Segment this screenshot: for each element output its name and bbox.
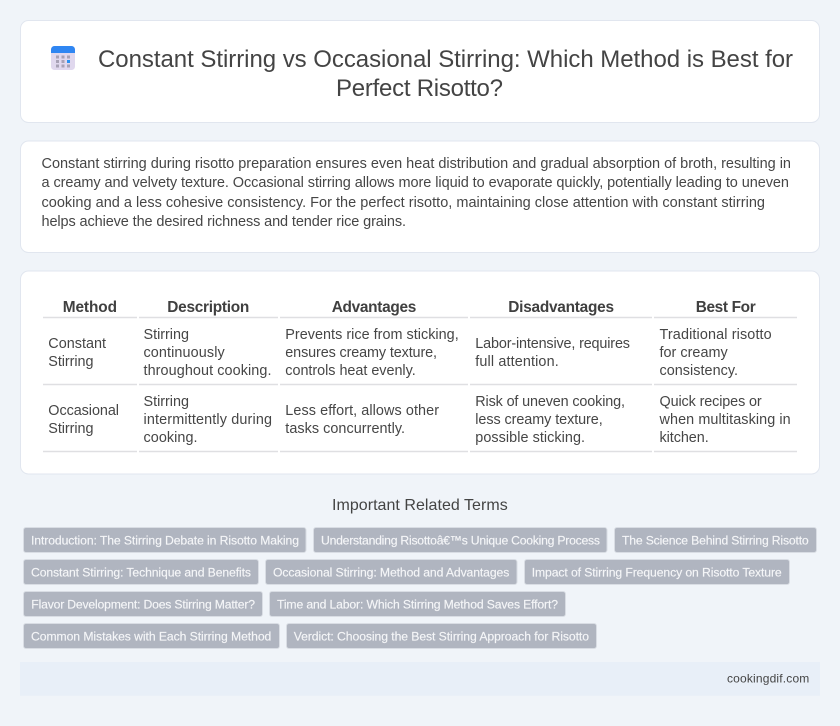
text block: introduction paragraph: Constant stirring during risotto preparation ensures even heat distribution and gradual absorption of broth, resulting in [42, 156, 791, 172]
tag list: related terms [24, 528, 816, 648]
table row: occasional stirring: Occasional [48, 403, 119, 419]
table row: constant stirring: controls heat evenly. [285, 363, 416, 379]
table row: occasional stirring: less creamy texture, [475, 412, 603, 428]
table row: constant stirring: continuously [144, 345, 225, 361]
table row: occasional stirring: Risk of uneven cooking, [475, 394, 625, 410]
table row: constant stirring: Prevents rice from sticking, [285, 327, 459, 343]
title: Perfect Risotto? [336, 75, 503, 102]
table row: occasional stirring: Stirring [48, 421, 94, 437]
table row: occasional stirring: cooking. [144, 430, 198, 446]
title [98, 46, 793, 102]
text block: introduction paragraph [42, 156, 791, 230]
table row: constant stirring: full attention. [475, 354, 559, 370]
table header row: Best For [696, 299, 756, 316]
table row: occasional stirring: tasks concurrently. [285, 421, 405, 437]
table row: occasional stirring: when multitasking in [658, 412, 791, 428]
table row: constant stirring: Stirring [48, 354, 94, 370]
tag list: related terms: Impact of Stirring Frequency on Risotto Texture [532, 565, 782, 579]
table row: occasional stirring: Less effort, allows other [285, 403, 439, 419]
table row: occasional stirring: Quick recipes or [660, 394, 762, 410]
tag list: related terms: Flavor Development: Does Stirring Matter? [31, 597, 255, 611]
table row: occasional stirring: kitchen. [660, 430, 709, 446]
table row: occasional stirring [43, 394, 797, 452]
heading: important related terms: Important Related Terms [332, 497, 508, 514]
table row: constant stirring: Constant [48, 336, 106, 352]
text block: introduction paragraph: cooking and a less cohesive consistency. For the perfect risotto, maintaining close attention with constant stirring [42, 195, 765, 211]
table row: occasional stirring: intermittently during [144, 412, 272, 428]
footer source text: cookingdif.com [727, 672, 809, 686]
table header row [43, 299, 797, 318]
tag list: related terms: The Science Behind Stirring Risotto [622, 533, 809, 547]
icon: calendar [51, 46, 75, 70]
table row: occasional stirring: possible sticking. [475, 430, 585, 446]
title: Constant Stirring vs Occasional Stirring: Which Method is Best for [98, 46, 793, 73]
tag list: related terms: Understanding Risottoâ€™s Unique Cooking Process [321, 533, 600, 547]
tag list: related terms: Time and Labor: Which Stirring Method Saves Effort? [277, 597, 558, 611]
tag list: related terms: Verdict: Choosing the Best Stirring Approach for Risotto [294, 629, 589, 643]
table header row: Disadvantages [508, 299, 614, 316]
tag list: related terms: Constant Stirring: Technique and Benefits [31, 565, 251, 579]
table row: constant stirring: Stirring [144, 327, 189, 343]
table header row: Description [167, 299, 249, 316]
table row: constant stirring: for creamy [660, 345, 728, 361]
text block: introduction paragraph: helps achieve the desired richness and tender rice grains. [42, 214, 406, 230]
panel: comparison table [20, 271, 820, 474]
tag list: related terms: Occasional Stirring: Method and Advantages [273, 565, 509, 579]
table row: constant stirring: consistency. [660, 363, 738, 379]
text block: introduction paragraph: a creamy and velvety texture. Occasional stirring allows more liquid to evaporate quickly, potentially leading to uneven [42, 175, 789, 191]
panel: title header [20, 20, 820, 122]
table header row: Advantages [332, 299, 416, 316]
table row: occasional stirring: Stirring [144, 394, 189, 410]
panel: introduction [20, 141, 820, 252]
table row: constant stirring: Traditional risotto [660, 327, 772, 343]
tag list: related terms: Introduction: The Stirring Debate in Risotto Making [31, 533, 299, 547]
table row: constant stirring: ensures creamy texture, [285, 345, 437, 361]
footer [20, 662, 820, 696]
table row: constant stirring: throughout cooking. [144, 363, 272, 379]
table header row: Method [63, 299, 117, 316]
tag list: related terms: Common Mistakes with Each Stirring Method [31, 629, 271, 643]
table row: constant stirring: Labor-intensive, requires [475, 336, 630, 352]
table row: constant stirring [43, 327, 797, 384]
